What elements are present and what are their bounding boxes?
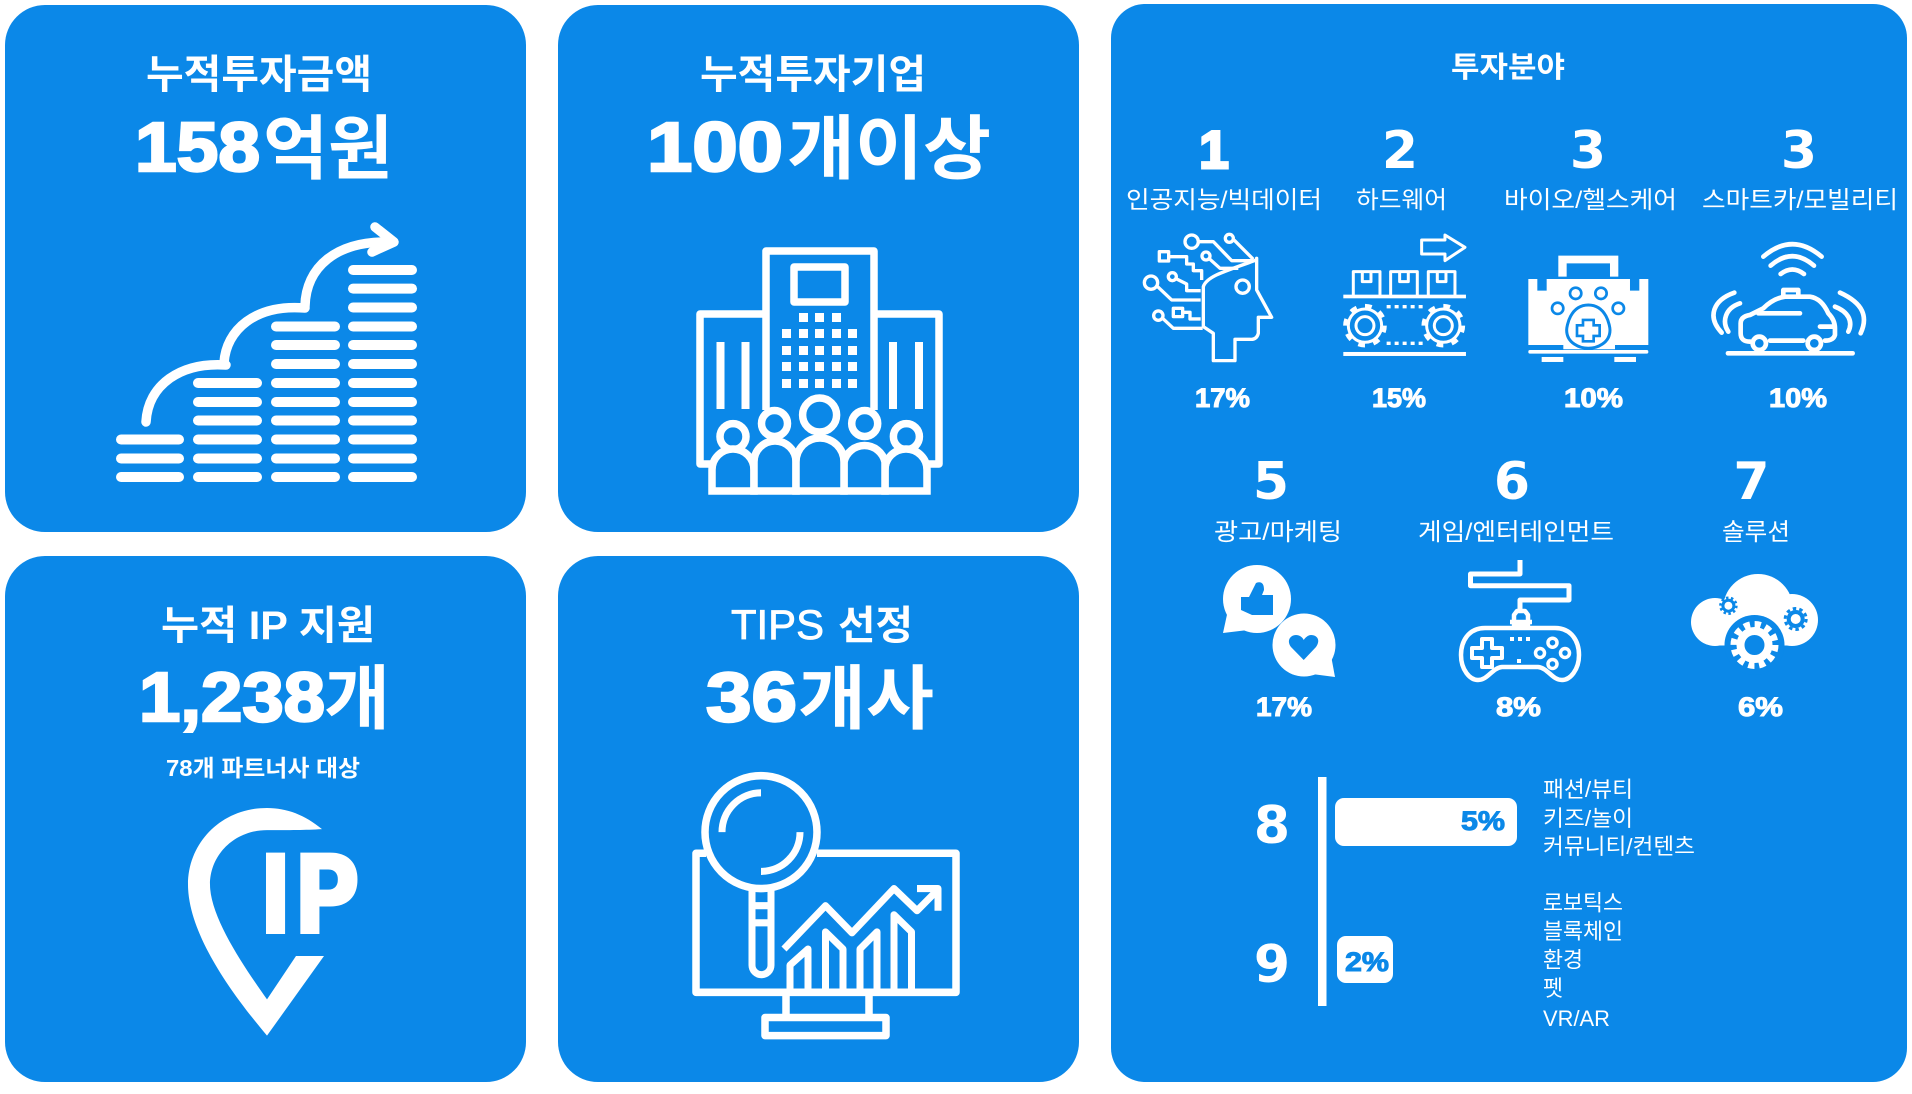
sector 3: smart car / mobility	[1702, 121, 1898, 413]
rank: 6	[1494, 452, 1530, 512]
panel: cumulative IP support	[5, 556, 526, 1082]
panel: investment sectors	[1111, 4, 1907, 1082]
lower-ranked sectors bar chart	[1254, 777, 1695, 1031]
percentage: 17%	[1256, 692, 1312, 722]
big number: 억원	[263, 110, 393, 188]
percentage: 6%	[1738, 692, 1783, 722]
sector 1: AI / big data	[1126, 121, 1322, 413]
rank 9 sector list: 환경	[1543, 948, 1583, 972]
rank: 3	[1570, 121, 1606, 181]
sector 2: hardware	[1343, 121, 1466, 413]
subheading: 78개 파트너사 대상	[166, 755, 360, 781]
rank: 2	[1382, 121, 1418, 181]
big number	[647, 108, 991, 188]
label: 게임/엔터테인먼트	[1418, 519, 1614, 546]
label: 스마트카/모빌리티	[1702, 187, 1898, 214]
icon: like and heart bubbles	[1223, 565, 1336, 677]
sector 5: advertising / marketing	[1214, 452, 1342, 722]
sector 3: bio / healthcare	[1504, 121, 1677, 413]
panel: cumulative portfolio companies	[558, 5, 1079, 532]
label: 인공지능/빅데이터	[1126, 187, 1322, 214]
big number: 100	[647, 108, 783, 186]
rank 8 sector list: 패션/뷰티	[1543, 777, 1633, 802]
heading	[731, 601, 913, 648]
icon: coin stacks with rising arrow	[116, 227, 417, 482]
bar: rank 9	[1337, 936, 1393, 983]
label: 바이오/헬스케어	[1504, 187, 1677, 214]
label: 광고/마케팅	[1214, 519, 1342, 546]
panel background	[5, 556, 526, 1082]
rank 9: 9	[1254, 935, 1290, 995]
percentage: 10%	[1769, 383, 1827, 413]
panel: cumulative investment amount	[5, 5, 526, 532]
big number	[135, 108, 393, 188]
rank 9 sector list	[1543, 890, 1623, 1031]
heading: 누적투자금액	[146, 53, 372, 97]
sector 7: solutions	[1691, 452, 1818, 722]
panel background	[558, 5, 1079, 532]
icon: conveyor belt	[1343, 235, 1466, 356]
icon: magnifier over monitor chart	[696, 776, 956, 1036]
rank: 5	[1253, 452, 1289, 512]
panel background	[558, 556, 1079, 1082]
rank 8 sector list: 키즈/놀이	[1543, 806, 1633, 831]
rank 9 sector list: 블록체인	[1543, 919, 1623, 944]
rank: 3	[1781, 121, 1817, 181]
heading: 누적투자기업	[700, 53, 926, 97]
icon: AI head	[1144, 234, 1272, 361]
axis	[1318, 777, 1326, 1006]
icon: pet medical case	[1528, 256, 1648, 362]
rank: 7	[1733, 452, 1770, 512]
icon: IP location pin: IP	[258, 831, 360, 959]
rank 8: 8	[1254, 796, 1290, 856]
rank: 1	[1199, 121, 1229, 180]
label: 하드웨어	[1356, 187, 1447, 214]
percentage: 17%	[1195, 383, 1250, 413]
rank 9 sector list: 펫	[1543, 976, 1563, 1001]
percentage: 10%	[1564, 383, 1623, 413]
big number: 36	[706, 658, 797, 736]
icon: cloud with gears	[1691, 574, 1818, 675]
big number: 158	[135, 108, 260, 186]
percentage: 15%	[1372, 383, 1426, 413]
icon: IP location pin	[188, 808, 360, 1036]
percentage: 8%	[1496, 692, 1541, 722]
panel background	[5, 5, 526, 532]
rank 8 sector list	[1543, 777, 1695, 859]
icon: connected car	[1714, 244, 1864, 353]
icon: buildings and people	[700, 251, 939, 491]
heading: 누적 IP 지원	[161, 604, 375, 648]
icon: game controller	[1461, 560, 1579, 680]
rank 8 sector list: 커뮤니티/컨텐츠	[1543, 834, 1695, 859]
label: 솔루션	[1722, 519, 1790, 546]
big number: 개	[324, 660, 390, 738]
heading: TIPS	[731, 601, 824, 648]
panel background	[1111, 4, 1907, 1082]
bar: rank 8	[1335, 798, 1517, 846]
rank 9 sector list: VR/AR	[1543, 1006, 1610, 1031]
heading: 선정	[838, 604, 913, 648]
big number: 1,238	[139, 658, 325, 736]
rank 9 sector list: 로보틱스	[1543, 890, 1623, 916]
big number: 개사	[798, 660, 934, 738]
sector 6: games / entertainment	[1418, 452, 1614, 722]
heading: 투자분야	[1451, 51, 1565, 84]
big number	[706, 658, 934, 738]
big number	[139, 658, 390, 738]
bar: rank 9: 2%	[1345, 947, 1389, 977]
panel: TIPS selection	[558, 556, 1079, 1082]
bar: rank 8: 5%	[1461, 806, 1505, 836]
big number: 개이상	[787, 110, 991, 188]
